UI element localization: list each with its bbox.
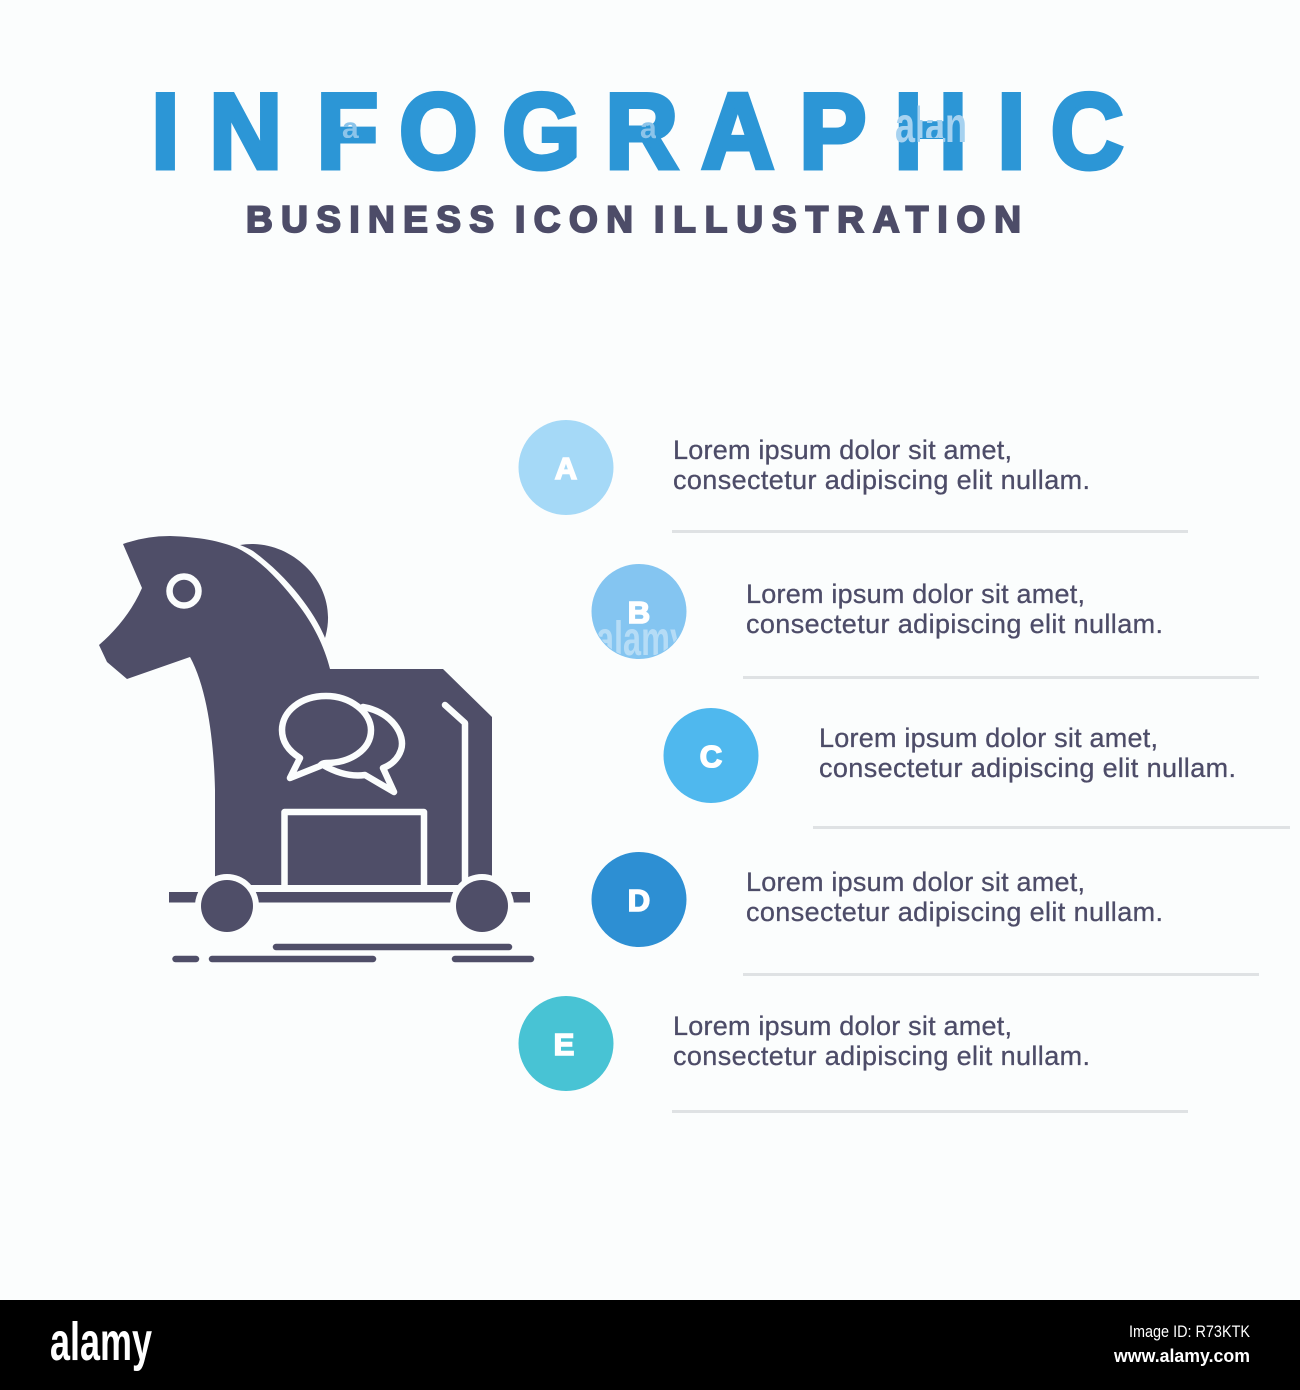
step D xyxy=(592,852,1259,976)
badge A xyxy=(518,420,614,515)
text C xyxy=(819,723,1236,783)
text A xyxy=(673,435,1090,495)
subtitle: BUSINESS xyxy=(246,199,494,240)
website: www.alamy.com xyxy=(1113,1346,1250,1366)
platform xyxy=(169,892,530,902)
text D: Lorem ipsum dolor sit amet, xyxy=(746,867,1085,897)
step B xyxy=(592,564,1259,679)
text A: consectetur adipiscing elit nullam. xyxy=(673,465,1090,495)
title xyxy=(156,90,1124,172)
text E xyxy=(673,1011,1090,1071)
text B: consectetur adipiscing elit nullam. xyxy=(746,609,1163,639)
badge E: E xyxy=(554,1027,574,1062)
horse eye xyxy=(170,576,198,606)
text C: Lorem ipsum dolor sit amet, xyxy=(819,723,1158,753)
subtitle xyxy=(246,199,1021,240)
horse mane xyxy=(240,544,328,638)
text D: consectetur adipiscing elit nullam. xyxy=(746,897,1163,927)
step C xyxy=(664,708,1290,829)
badge C: C xyxy=(700,739,722,774)
ground lines xyxy=(176,947,531,959)
step E xyxy=(518,996,1188,1113)
speech bubbles xyxy=(282,696,402,792)
footer logo: alamy xyxy=(50,1312,152,1372)
text B: Lorem ipsum dolor sit amet, xyxy=(746,579,1085,609)
text A: Lorem ipsum dolor sit amet, xyxy=(673,435,1012,465)
door xyxy=(284,812,424,885)
text E: Lorem ipsum dolor sit amet, xyxy=(673,1011,1012,1041)
footer bar xyxy=(0,1300,1300,1390)
side line xyxy=(445,705,465,885)
icon: trojan horse xyxy=(99,536,531,959)
image id: Image ID: R73KTK xyxy=(1129,1322,1251,1341)
text C: consectetur adipiscing elit nullam. xyxy=(819,753,1236,783)
title: a xyxy=(342,112,359,145)
badge B xyxy=(592,564,688,666)
title: alan xyxy=(895,97,967,153)
horse body xyxy=(99,536,492,885)
badge D xyxy=(592,852,686,947)
subtitle: ICON xyxy=(515,199,633,240)
badge D: D xyxy=(628,883,650,918)
text B xyxy=(746,579,1163,639)
subtitle: ILLUSTRATION xyxy=(654,199,1021,240)
title: INFOGRAPHIC xyxy=(151,72,1124,192)
text D xyxy=(746,867,1163,927)
title: a xyxy=(640,112,657,145)
wheel right xyxy=(450,874,514,938)
badge A: A xyxy=(555,451,577,486)
badge B: alamy xyxy=(596,613,688,666)
badge E xyxy=(518,996,614,1091)
text E: consectetur adipiscing elit nullam. xyxy=(673,1041,1090,1071)
badge C xyxy=(664,708,758,803)
badge B: B xyxy=(628,595,650,630)
step A xyxy=(518,420,1188,533)
wheel left xyxy=(195,874,259,938)
